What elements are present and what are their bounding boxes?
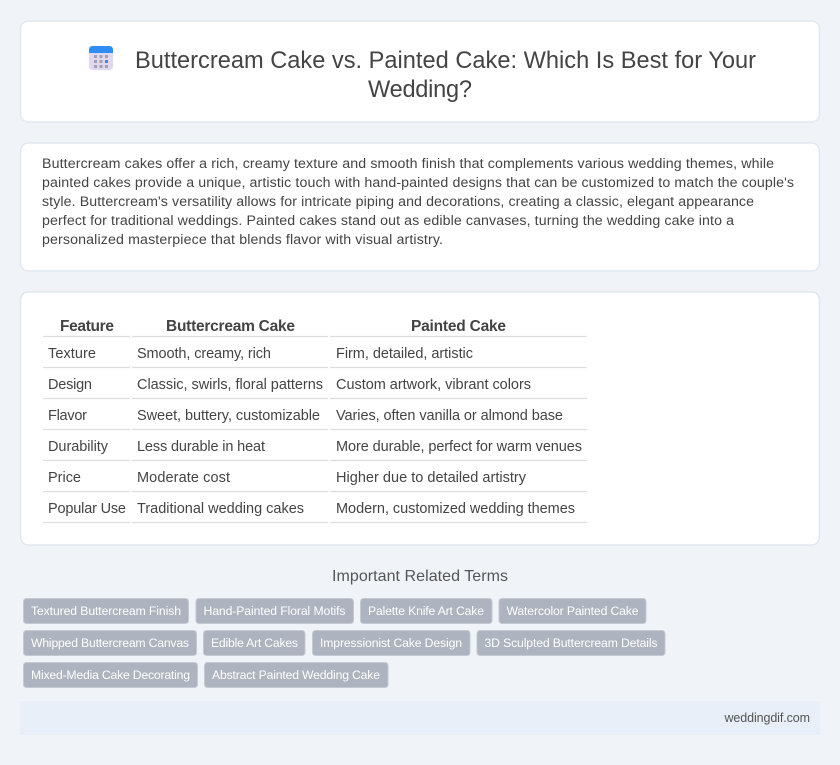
title: Buttercream Cake vs. Painted Cake: Which Is Best for Your — [135, 48, 756, 74]
row: popular use: Modern, customized wedding themes — [336, 501, 575, 517]
panel: comparison table — [20, 292, 820, 545]
tag: Palette Knife Art Cake — [368, 604, 484, 618]
row: texture: Smooth, creamy, rich — [137, 346, 271, 362]
tag: Whipped Buttercream Canvas — [31, 636, 189, 650]
row: popular use: Popular Use — [48, 501, 126, 517]
row: durability — [48, 439, 582, 455]
row: price: Price — [48, 470, 81, 486]
tag: 3D Sculpted Buttercream Details — [484, 636, 658, 650]
row: design: Classic, swirls, floral patterns — [137, 377, 323, 393]
row: design: Custom artwork, vibrant colors — [336, 377, 531, 393]
footer — [20, 701, 820, 735]
row: durability: More durable, perfect for warm venues — [336, 439, 582, 455]
tag — [312, 630, 470, 656]
row: popular use — [48, 501, 575, 517]
tag: Hand-Painted Floral Motifs — [204, 604, 346, 618]
text block: description: personalized masterpiece that blends flavor with visual artistry. — [42, 232, 443, 248]
title — [135, 48, 756, 103]
tag — [24, 662, 198, 688]
tag — [204, 630, 305, 656]
tag — [196, 598, 354, 624]
panel: header — [20, 21, 820, 122]
row: texture — [48, 346, 473, 362]
row: texture: Texture — [48, 346, 96, 362]
row: price — [48, 470, 527, 486]
row: flavor: Sweet, buttery, customizable — [137, 408, 320, 424]
tags: related terms — [24, 598, 665, 688]
text block: description: Buttercream cakes offer a rich, creamy texture and smooth finish that complements various wedding themes, while — [42, 156, 774, 172]
tag: Textured Buttercream Finish — [31, 604, 181, 618]
row: durability: Less durable in heat — [137, 439, 265, 455]
tag — [24, 598, 188, 624]
row: texture: Firm, detailed, artistic — [336, 346, 473, 362]
footer: weddingdif.com — [724, 711, 810, 725]
table header: Feature — [60, 318, 114, 335]
text block: description: style. Buttercream's versatility allows for intricate piping and decorations, creating a classic, elegant appearance — [42, 194, 754, 210]
tag: Edible Art Cakes — [211, 636, 298, 650]
tag — [477, 630, 665, 656]
tag — [24, 630, 196, 656]
row: durability: Durability — [48, 439, 109, 455]
tag: Watercolor Painted Cake — [506, 604, 639, 618]
row: flavor: Varies, often vanilla or almond base — [336, 408, 563, 424]
tag — [499, 598, 646, 624]
tag — [204, 662, 388, 688]
text block: description — [42, 156, 794, 248]
panel: description — [20, 143, 820, 271]
tag: Abstract Painted Wedding Cake — [212, 668, 380, 682]
heading: related terms: Important Related Terms — [332, 568, 508, 585]
tag — [360, 598, 492, 624]
table header: Buttercream Cake — [166, 318, 295, 335]
text block: description: painted cakes provide a unique, artistic touch with hand-painted designs that can be customized to match the couple's — [42, 175, 794, 191]
icon: calendar — [89, 46, 113, 70]
row: popular use: Traditional wedding cakes — [137, 501, 304, 517]
row: design — [48, 377, 531, 393]
text block: description: perfect for traditional weddings. Painted cakes stand out as edible canvases, turning the wedding cake into a — [42, 213, 734, 229]
row: price: Moderate cost — [137, 470, 230, 486]
tag: Impressionist Cake Design — [320, 636, 462, 650]
row: design: Design — [48, 377, 92, 393]
row: flavor: Flavor — [48, 408, 87, 424]
row: price: Higher due to detailed artistry — [336, 470, 527, 486]
row: flavor — [48, 408, 563, 424]
title: Wedding? — [368, 77, 472, 103]
tag: Mixed-Media Cake Decorating — [31, 668, 190, 682]
table header: Painted Cake — [411, 318, 506, 335]
table header — [60, 318, 506, 335]
